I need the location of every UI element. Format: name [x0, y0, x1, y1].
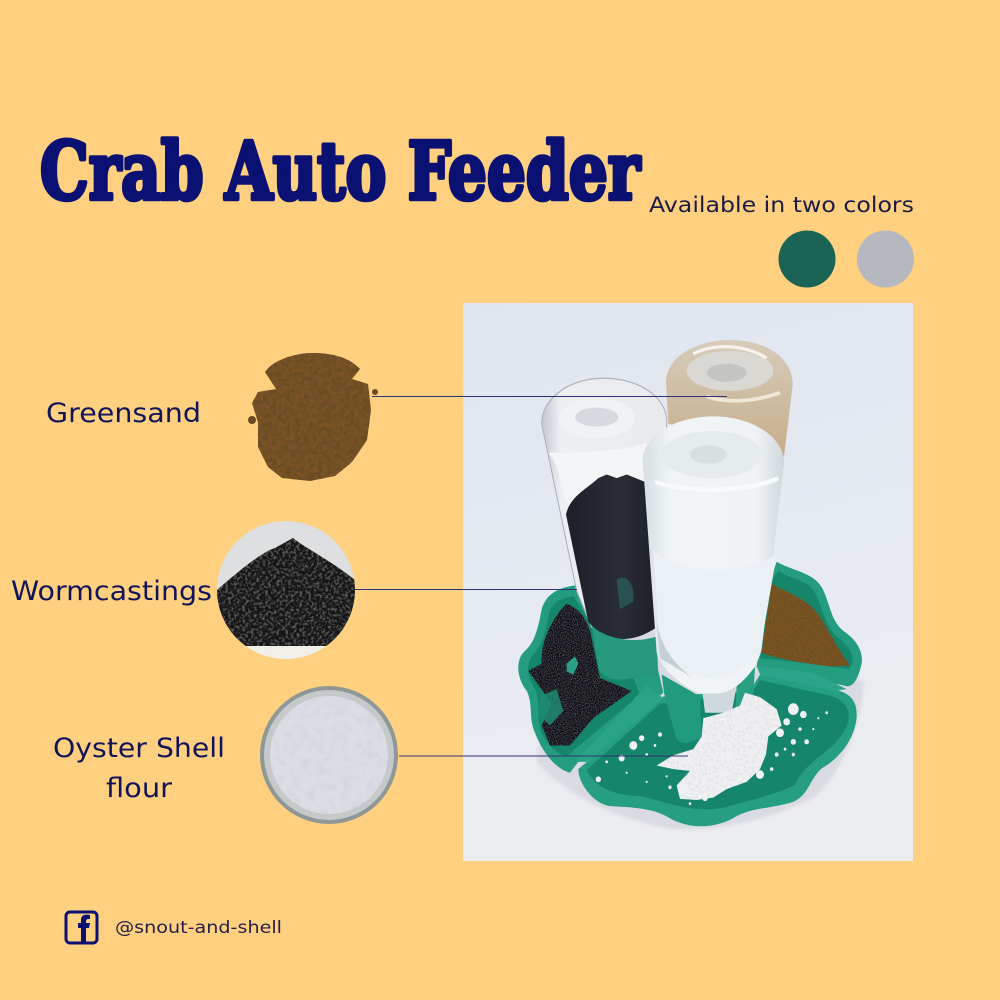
- swatch: grey: [857, 230, 914, 288]
- connector: oyster shell: [399, 755, 688, 757]
- dark contents: [566, 475, 657, 639]
- greensand in tray: [762, 584, 850, 667]
- oyster shell text: [53, 733, 225, 804]
- feeder illustration: [518, 340, 863, 829]
- bottle: back, tan: [666, 340, 793, 456]
- greensand crumbs: [248, 389, 378, 424]
- wormcastings text: Wormcastings: [11, 576, 212, 607]
- leg right: [735, 667, 755, 726]
- wormcastings in tray: [528, 604, 632, 745]
- photo backdrop: [463, 303, 913, 861]
- greensand text: Greensand: [46, 398, 201, 429]
- greensand sample: [252, 353, 371, 481]
- wormcastings sample: [217, 521, 355, 659]
- oyster shell pile: [596, 693, 828, 805]
- tray section: front: [575, 665, 857, 826]
- tray section: right: [757, 562, 862, 686]
- color availability note: Available in two colors: [649, 193, 914, 218]
- swatch: green: [778, 230, 836, 288]
- ingredient: greensand: [46, 353, 378, 481]
- social handle: @snout-and-shell: [115, 918, 282, 938]
- ingredient: oyster shell flour: [53, 686, 398, 824]
- connector: greensand: [372, 396, 727, 398]
- soft shadow under tray: [537, 627, 863, 829]
- bottle: front, oyster shell: [643, 416, 784, 743]
- title: Crab Auto Feeder: [40, 124, 641, 218]
- feeder stem: left bottle: [592, 625, 658, 680]
- color swatches: [778, 230, 914, 288]
- tray divider ridge: [575, 685, 663, 762]
- ingredient: wormcastings: [11, 521, 355, 659]
- product photo panel: [463, 303, 913, 861]
- leg left: [662, 675, 702, 743]
- bottle: left, wormcastings: [542, 378, 667, 639]
- tray section: left: [518, 585, 663, 773]
- oyster shell text: Oyster Shell: [53, 733, 225, 764]
- oyster shell text: flour: [106, 773, 173, 804]
- tray speck: [567, 656, 578, 675]
- connector: wormcastings: [355, 588, 577, 590]
- icon: facebook: [66, 912, 97, 943]
- oyster shell sample: [260, 686, 398, 824]
- neck: [702, 685, 737, 713]
